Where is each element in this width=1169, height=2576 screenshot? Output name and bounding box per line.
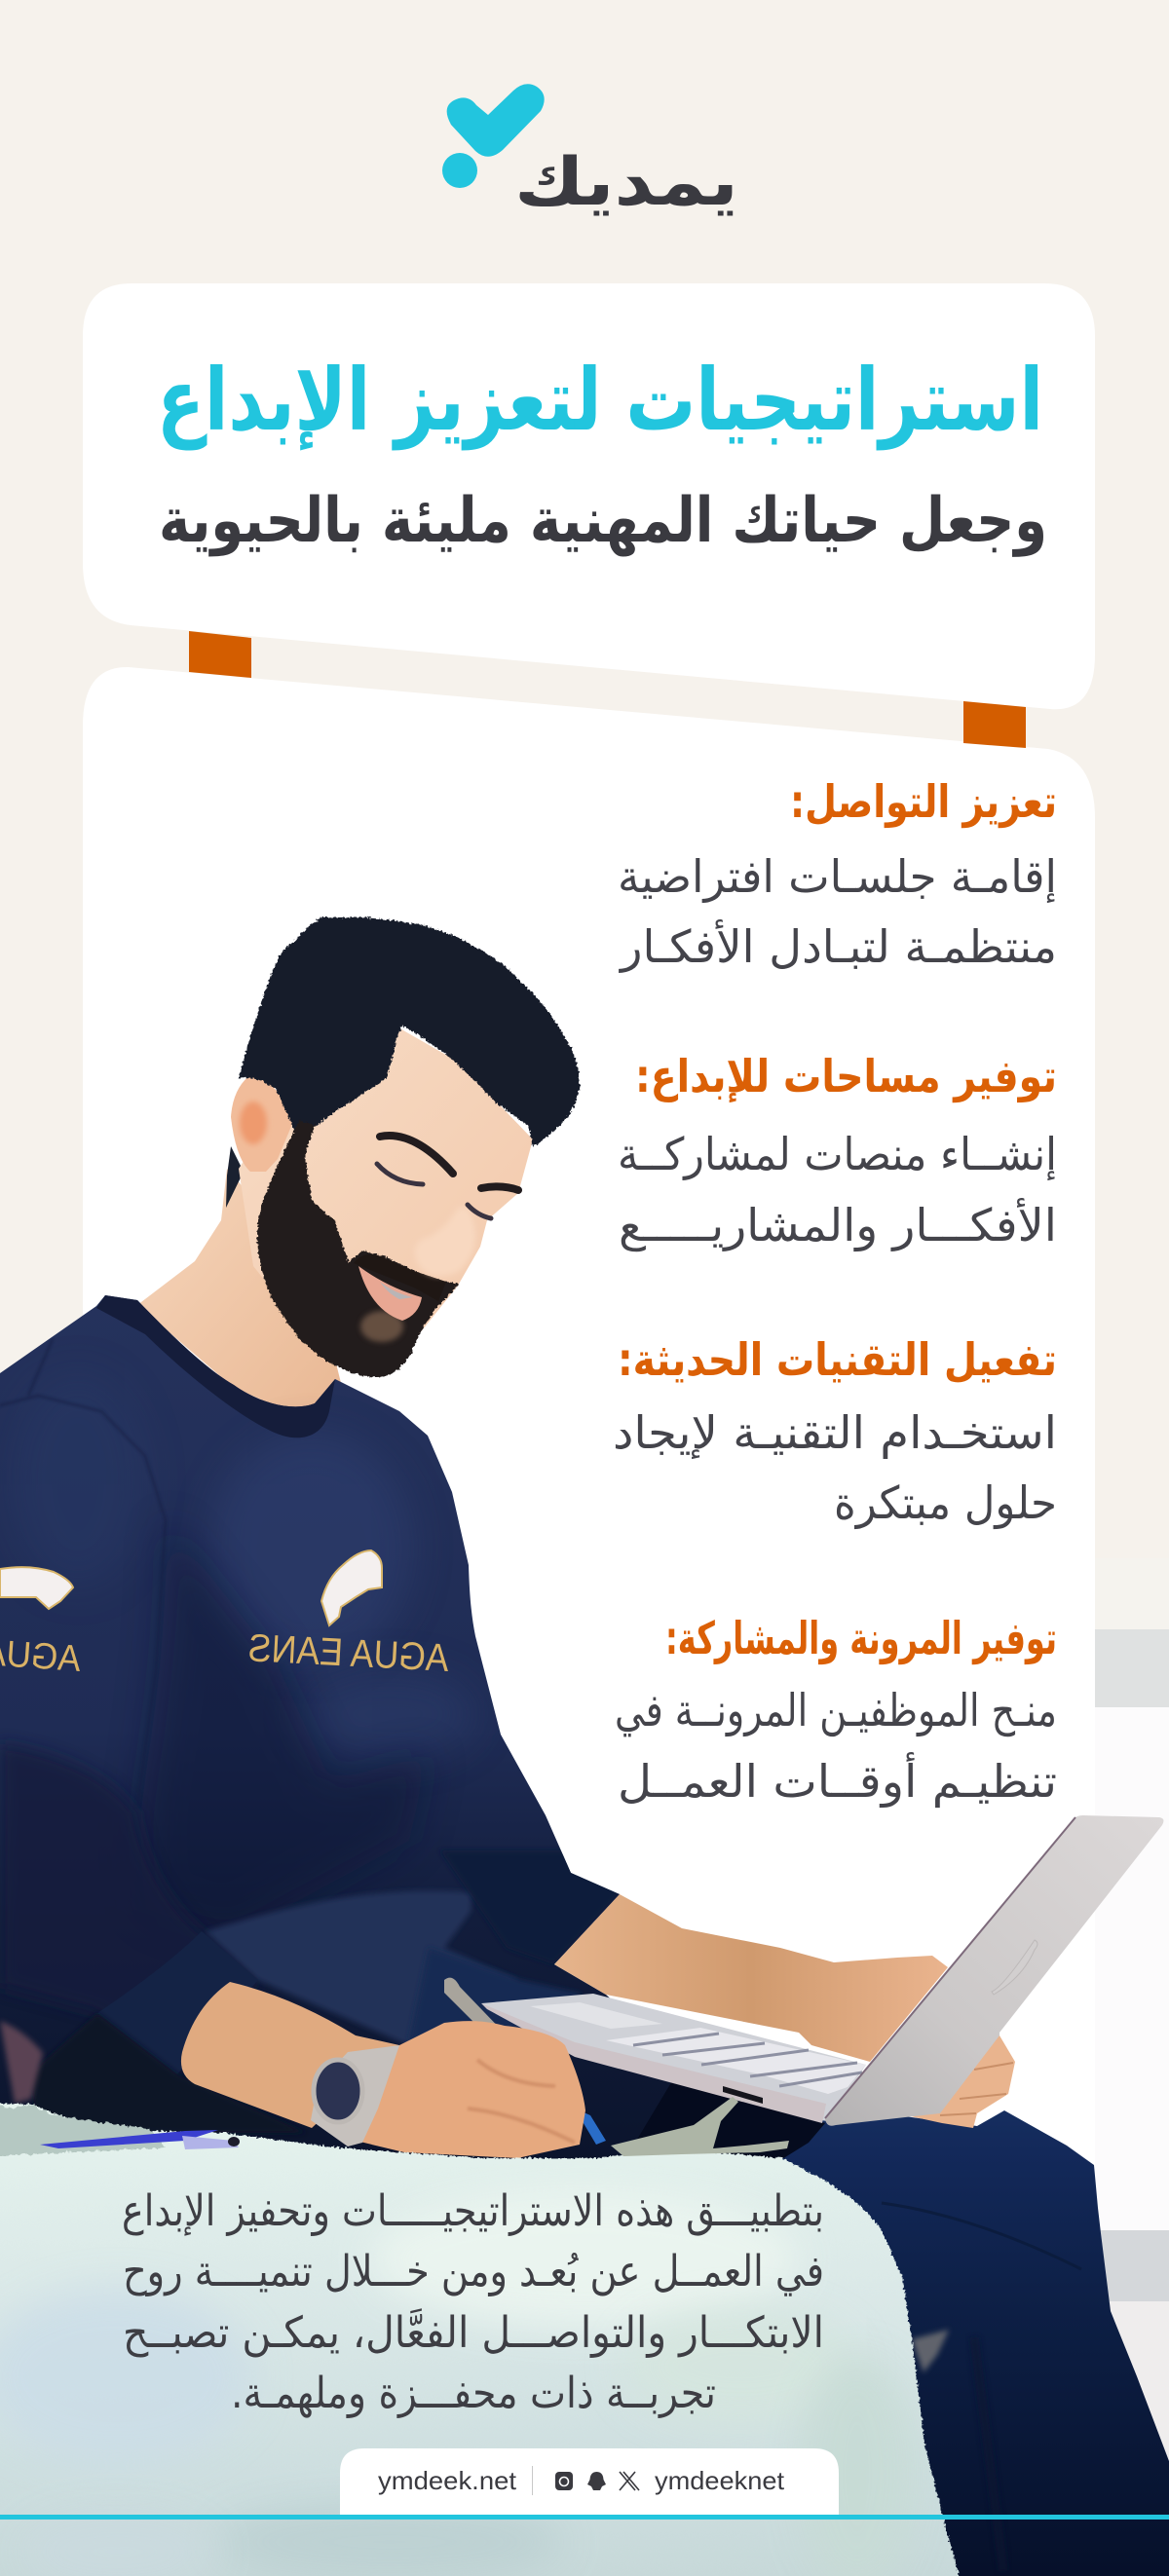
closing paragraph: تجربــة ذات محفـــزة وملهمـة. [231,2369,716,2418]
writing hand [352,2021,585,2158]
port [723,2086,763,2104]
connector: left orange tab [189,631,251,678]
icon: snapchat [587,2472,606,2490]
laptop lid [825,1815,1163,2126]
background room bands on the right [1095,1558,1169,2576]
laptop [481,1815,1163,2126]
goatee highlight [360,1311,403,1342]
blanket fringe [0,2104,166,2157]
pants [546,2045,1169,2576]
pen on table [40,2130,218,2148]
blanket foreground [0,2094,994,2576]
eyes [377,1164,491,1218]
tip 2 body: إنشــاء منصات لمشاركــة [618,1128,1057,1180]
pen [444,1978,606,2145]
icon: sleeve whale emblem [0,1567,73,1609]
tip 3 heading: تفعيل التقنيات الحديثة: [618,1333,1057,1386]
watch [311,2045,399,2147]
tip 1 body: إقامـة جلسـات افتراضية [618,850,1057,904]
tip 3 body: استخـدام التقنيـة لإيجاد [613,1406,1057,1459]
social handle: ymdeeknet [655,2466,785,2495]
logo wordmark: يمديك [514,144,738,221]
keyboard [606,2028,866,2094]
lid emblem [992,1940,1037,1995]
beard [257,1120,460,1377]
face [239,1023,533,1363]
neck [137,1169,341,1412]
tip 3 body: حلول مبتكرة [834,1476,1057,1530]
tip 1 [618,775,1057,973]
lower fingers [897,2035,1015,2128]
tip 1 body: منتظمـة لتبـادل الأفكـار [619,918,1057,973]
icon: dot [442,153,477,188]
teeth [380,1282,413,1299]
panel: title card [83,283,1095,709]
tip 2 [618,1050,1057,1252]
closing paragraph: الابتكـــار والتواصـــل الفعَّال، يمكـن تصبــح [123,2308,824,2358]
lips [358,1266,422,1321]
tip 2 heading: توفير مساحات للإبداع: [635,1050,1057,1102]
tip 4 body: منـح الموظفيـن المرونــة في [615,1684,1057,1737]
right forearm [554,1894,948,2062]
eyebrows [380,1136,518,1190]
sweater logo [0,1550,450,1680]
laptop base [481,1994,866,2121]
chest print: AGUA EANS [247,1626,450,1680]
closing paragraph [122,2186,824,2418]
nose [415,1208,475,1276]
closing paragraph: في العمــل عن بُعـد ومن خـــلال تنميــــة روح [123,2247,824,2296]
tip 2 body: الأفكـــار والمشاريـــــع [619,1197,1057,1252]
tip 4 [615,1612,1057,1809]
tip 2 body [618,1128,1057,1252]
tip 1 body [618,850,1057,973]
closing paragraph: بتطبيـــق هذه الاستراتيجيـــــات وتحفيز الإبداع [122,2186,824,2236]
moustache [354,1254,446,1301]
photo: person with laptop [0,917,1169,2576]
tip 1 heading: تعزيز التواصل: [790,775,1057,828]
tip 3 [613,1333,1057,1530]
left forearm [181,1982,399,2128]
website: ymdeek.net [378,2466,517,2495]
tip 4 body [615,1684,1057,1809]
icon: instagram [555,2472,573,2490]
logo [442,84,738,221]
back hair wisp [226,1146,244,1208]
panel: tips card [83,667,1095,2191]
ear [231,1074,295,1172]
clip on table [611,2097,789,2156]
sweater fold [206,1890,517,2045]
trackpad [530,2002,662,2029]
footer contact pill [340,2448,839,2515]
collar [96,1295,335,1437]
icon: chest whale emblem [321,1550,382,1625]
icon: check mark [447,84,545,157]
tip 4 body: تنظيـم أوقــات العمــل [618,1752,1057,1809]
connector: right orange tab [963,701,1026,748]
cuff [97,1931,258,2074]
hair [239,917,580,1146]
sweater [0,1295,682,2162]
footer line [0,2515,1169,2520]
tip 3 body [613,1406,1057,1530]
icon: x [620,2472,639,2490]
